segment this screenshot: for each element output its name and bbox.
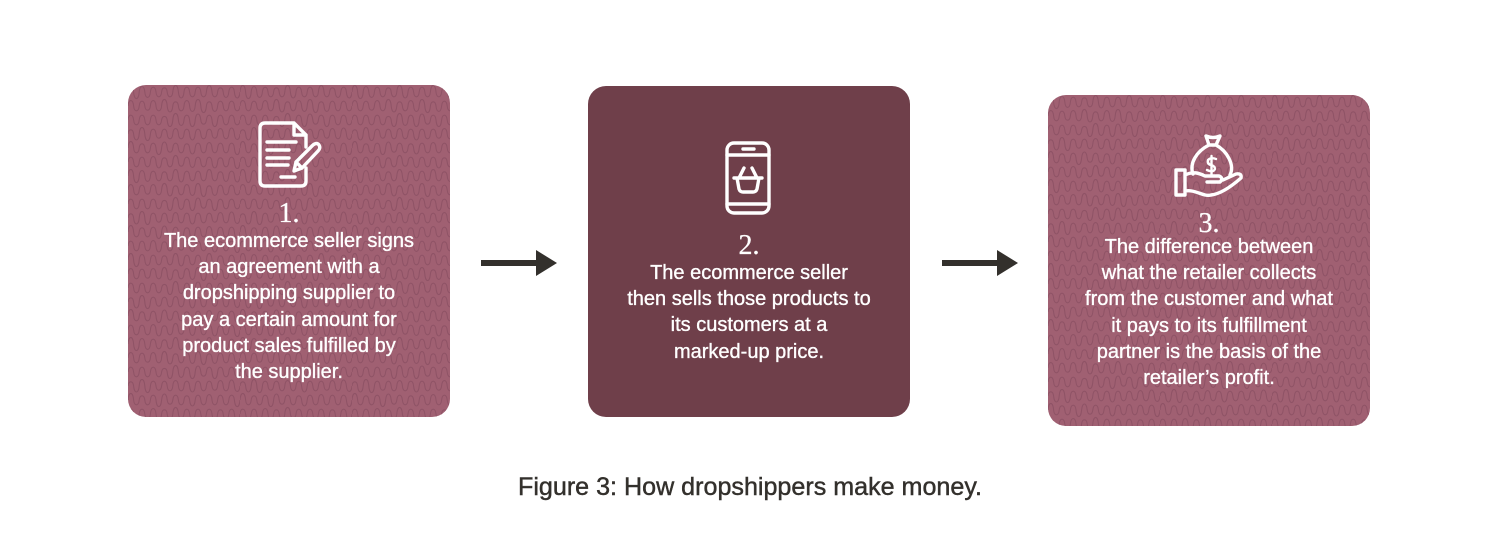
panel: step 3 [1048,95,1370,426]
step text: an agreement with a [198,256,380,278]
step text [1085,236,1333,389]
panel: step 2 [588,86,910,417]
step text: pay a certain amount for [181,309,397,331]
step text: The ecommerce seller signs [164,230,414,252]
arrow 2 [942,250,1018,276]
caption: Figure 3: How dropshippers make money. [518,473,982,501]
step text: it pays to its fulfillment [1111,315,1307,337]
step text: The difference between [1105,236,1313,258]
step text: partner is the basis of the [1097,341,1321,363]
arrow 1 [481,250,557,276]
step text: retailer’s profit. [1143,367,1275,389]
step text [164,230,414,383]
step number: 1. [278,198,300,229]
step text: what the retailer collects [1102,262,1316,284]
step text: from the customer and what [1085,288,1333,310]
step text: product sales fulfilled by [182,335,396,357]
step text: the supplier. [235,361,343,383]
step text: dropshipping supplier to [183,282,395,304]
icon: phone with basket [725,141,771,215]
step text [627,262,871,363]
step number: 3. [1198,208,1220,239]
step text: marked-up price. [674,341,824,363]
step text: then sells those products to [627,288,871,310]
step text: The ecommerce seller [650,262,848,284]
step text: its customers at a [671,314,827,336]
icon: document with pen [258,121,322,188]
icon: hand holding money bag [1174,134,1243,197]
panel: step 1 [128,85,450,417]
step number: 2. [738,230,760,261]
